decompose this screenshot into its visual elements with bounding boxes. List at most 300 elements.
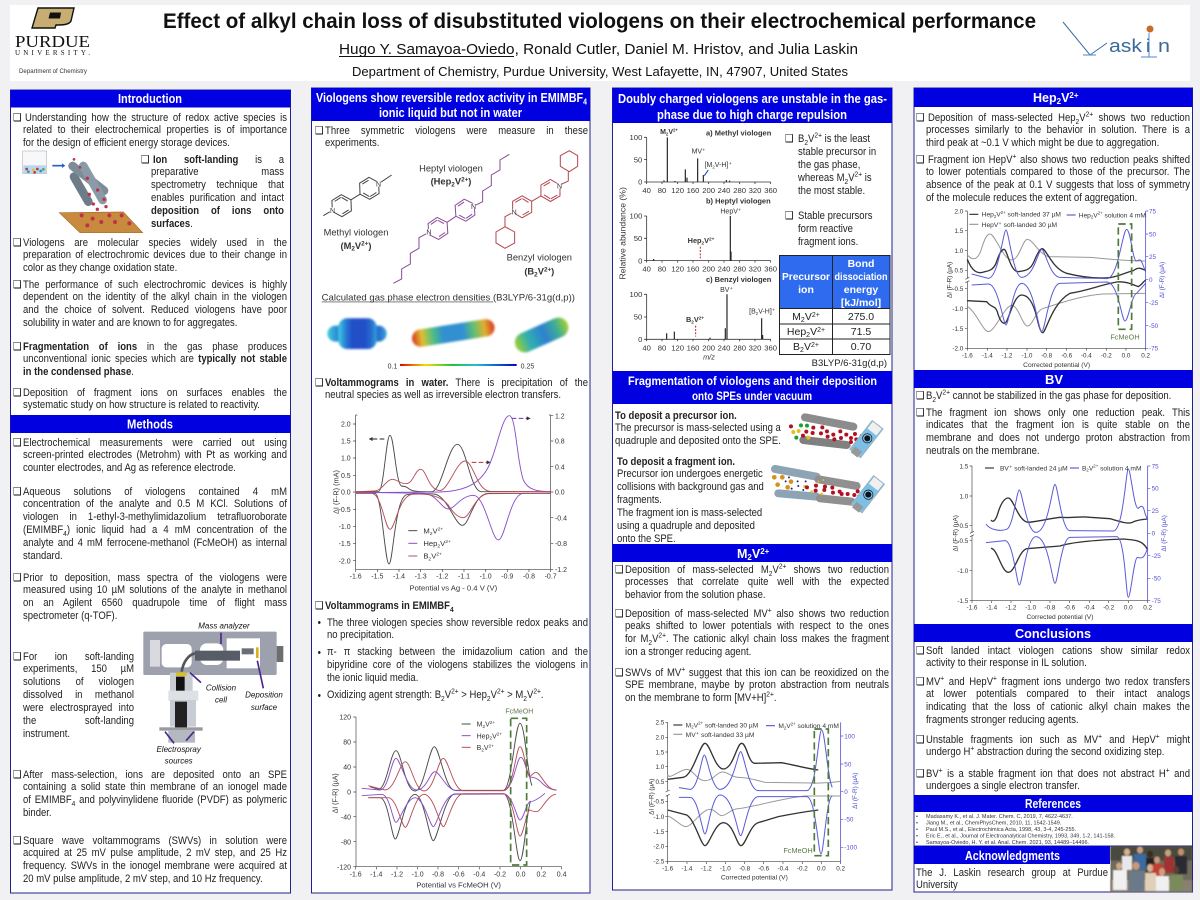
chart: mass spectra: a) Methyl viologen [706, 130, 771, 137]
chart: mass spectra: 200 [702, 343, 715, 352]
text: deposit fragment: The fragment ion is mass-selected [617, 507, 762, 519]
chart: BV SWV: ΔI (F-R) (µA) [952, 515, 959, 551]
chart: Hep2V SWV [947, 208, 1166, 369]
table: bond dissociation energy: V [810, 326, 817, 338]
chart: M2V SWV: -0.6 [758, 865, 770, 872]
legend: M [423, 526, 430, 535]
text: conclusion 2 [916, 673, 1190, 726]
text: methods SWV: 20 mV pulse amplitude, 2 mV step, and 10 Hz frequency. [23, 873, 263, 885]
chart: BV SWV: -0.2 [1103, 605, 1115, 612]
text: conclusion 1: Soft landed intact viologen cations show similar redox [926, 644, 1190, 656]
chart: mass spectra: 50 [634, 155, 642, 164]
text: Hep2V deposition: processes similarly to the behavior in solution. There is a [926, 124, 1190, 136]
chart: Hep2V SWV: 0 [1149, 277, 1153, 284]
heading: viologens redox [312, 88, 590, 121]
text: methods SWV: ❑ [13, 834, 22, 846]
chart: BV SWV: 25 [1152, 508, 1159, 515]
chart: Hep2V SWV: -75 [1149, 346, 1159, 353]
text: MV deposition [615, 605, 889, 658]
chart: mass spectra: b) Heptyl viologen [706, 198, 771, 205]
legend: 2+ [1093, 464, 1099, 469]
text: acknowledgments [916, 866, 1108, 891]
text: ion soft-landing [141, 152, 284, 230]
icon: soft-landing instrument diagram: Electrospray [156, 745, 202, 754]
text: HepV fragment: ❑ [916, 152, 925, 166]
chart: BV SWV: 0 [1152, 531, 1156, 538]
icon: soft-landing instrument diagram: Deposition [245, 691, 283, 700]
table: bond dissociation energy: 2 [800, 347, 804, 354]
text: device performance: solubility in water and are known to for aggregates. [23, 317, 237, 329]
legend: V [432, 526, 438, 535]
legend: B [477, 745, 481, 752]
text: SWVs of MV: SPE membrane, maybe by proton abstraction from neutrals [625, 679, 889, 691]
text: HepV fragment: absence of the peak at 0.1 V suggests that loss of symmetry [926, 179, 1190, 191]
legend: 2+ [1098, 211, 1103, 216]
text: EMIMBF4 bullets: bipyridine core of the viologens stabilizes the viologens in [327, 659, 588, 671]
icon: soft-landing instrument diagram: Collision [206, 683, 237, 692]
text: methods soft-landing: instrument. [23, 728, 70, 740]
heading: M2V: 2 [747, 553, 752, 562]
chart: M2V SWV [649, 720, 859, 882]
text: MV deposition: for M2V2+. The cationic alkyl chain loss makes the fragment [625, 631, 889, 647]
chart: BV SWV: 0.2 [1143, 605, 1153, 612]
heading: Introduction: Introduction [118, 92, 182, 106]
table: bond dissociation energy: 275.0 [848, 311, 874, 323]
chart: mass spectra: Hep [688, 236, 702, 245]
text: voltammograms in EMIMBF4: ❑ [315, 598, 324, 612]
chart: Hep2V SWV: -1.4 [982, 352, 993, 359]
text: BV fragment: indicates that the fragment ion is quite stable on the [926, 419, 1190, 431]
text: three viologens: experiments. [325, 137, 379, 149]
text: methods soft-landing: For ion soft-landing [23, 650, 134, 662]
chart: voltammograms in EMIMBF4: -0.8 [432, 871, 444, 878]
text: acknowledgments: The J. Laskin research group at Purdue [916, 866, 1108, 878]
chart: Hep2V SWV: -0.4 [1081, 352, 1092, 359]
callout: FcMeOH box [783, 729, 828, 856]
text: BV fragment: ❑ [916, 406, 925, 418]
chart: voltammograms in water: 1.5 [341, 439, 351, 446]
chart: mass spectra: 80 [658, 265, 666, 274]
panel: fourth column [914, 88, 1192, 892]
chart: BV SWV: -0.5 [957, 538, 969, 545]
density blob: heptyl [411, 318, 496, 348]
chart: mass spectra: B [686, 315, 691, 324]
chart: voltammograms in water: ΔI (F-R) (mA) [331, 470, 340, 514]
text: viologens use [13, 236, 287, 274]
chart: Hep2V SWV: ΔI (F-R) (µA) [1159, 262, 1166, 298]
chart: mass spectra: V-H]⁺ [715, 161, 732, 169]
legend: 2+ [436, 552, 442, 558]
text: deposition of fragments: Deposition of fragment ions on surfaces enables the [23, 386, 287, 398]
title: Effect of alkyl chain loss of disubstituted viologens on their electrochemical performance [163, 10, 1036, 33]
heading: References: References [1025, 797, 1081, 811]
molecule: heptyl viologen: (Hep [431, 177, 451, 187]
legend: Hep [1079, 212, 1091, 219]
text: SWVs of MV: on the membrane to form [MV+H]2+. [625, 690, 777, 704]
chart: mass spectra: 240 [718, 186, 730, 195]
chart: voltammograms in EMIMBF4: Potential vs FcMeOH (V) [416, 881, 501, 890]
chart: M2V SWV: 100 [844, 733, 855, 740]
references list: Jiang M., et al., ChemPhysChem, 2010, 11, 1542-1549. [926, 820, 1062, 826]
text: methods solutions: concentration of the analyte and 0.5 M KCl. Solutions of [23, 498, 287, 510]
icon: soft-landing instrument diagram: surface [251, 703, 278, 712]
legend: solution 4 mM [796, 723, 839, 730]
text: Hep2V deposition: third peak at ~0.1 V which might be due to aggregation. [926, 137, 1159, 149]
caption: calculated densities: Calculated gas phase electron densities (B3LYP/6-31g(d,p)) [322, 293, 575, 303]
text: methods solutions: viologen in 1-ethyl-3-methylimidazolium tetrafluoroborate [23, 511, 287, 523]
chart: voltammograms in EMIMBF4: ΔI (F-R) (µA) [332, 773, 339, 813]
text: HepV fragment: Fragment ion HepV+ also shows two reduction peaks shifted [928, 151, 1190, 166]
chart: mass spectra: 50 [634, 234, 642, 243]
text: SWVs of MV [615, 664, 889, 704]
text: voltammograms in water: neutral species as well as irreversible electron transfers. [325, 389, 561, 401]
text: EMIMBF4 bullets: π- π stacking between the imidazolium cation and the [327, 646, 588, 658]
heading: viologens redox: Viologens show reversible redox activity in EMIMBF [316, 91, 625, 105]
text: SWVs of MV: ❑ [615, 666, 624, 678]
chart: BV SWV: -50 [1152, 576, 1161, 583]
molecule: heptyl viologen: 2 [451, 181, 455, 188]
logo: Purdue University: PURDUE [15, 32, 90, 51]
text: ion soft-landing: preparative mass [151, 166, 284, 178]
table: bond dissociation energy: 2+ [817, 327, 825, 334]
chart: voltammograms in water: -2.0 [339, 558, 351, 565]
chart: mass spectra: V-H]⁺ [758, 308, 776, 316]
legend: 2 [1086, 468, 1089, 473]
text: methods solutions: Aqueous solutions of viologens contained 4 mM [23, 486, 287, 498]
chart: voltammograms in water: 2.0 [341, 422, 351, 429]
text: stable precursors: ❑ [785, 209, 794, 222]
chart: mass spectra: 360 [764, 343, 777, 352]
chart: voltammograms in water: -1.5 [371, 574, 383, 581]
panel: second column [312, 88, 590, 893]
text: conclusion 3 [916, 731, 1190, 758]
chart: mass spectra: HepV⁺ [720, 208, 742, 216]
legend: HepV⁺ soft-landed 30 µM [982, 222, 1057, 229]
text: deposit fragment: collisions with background gas and [617, 481, 764, 493]
text: ion soft-landing: spectrometry technique that [151, 179, 284, 191]
molecule: heptyl viologen: Heptyl viologen [419, 163, 483, 173]
chart: mass spectra: [M [705, 162, 712, 169]
text: conclusion 3: undergo H+ abstraction during the second oxidizing step. [926, 744, 1164, 758]
text: gas-phase stability: the most stable. [798, 185, 865, 197]
text: EMIMBF4 bullets: • [318, 690, 321, 702]
chart: M2V SWV: -1.4 [682, 865, 693, 872]
table: bond dissociation energy: ion [798, 284, 814, 296]
text: EMIMBF4 bullets: Oxidizing agent strength: B2V2+ > Hep2V2+ > M2V2+. [327, 686, 544, 703]
text: EMIMBF4 bullets: • [318, 646, 321, 658]
text: methods soft-landing: the soft-landing [23, 715, 134, 727]
text: BV fragment: neutrals on the membrane. [926, 445, 1040, 457]
chart: mass spectra: 2+ [673, 127, 678, 132]
chart: M2V SWV: -1.0 [653, 814, 665, 821]
heading: Methods [10, 415, 290, 433]
text: methods SPE: ❑ [13, 768, 22, 780]
heading: BV: BV [1045, 372, 1063, 387]
text: intro bullet 1: related to their electrochemical properties is of importance [23, 124, 287, 136]
chart: voltammograms in water: -1.5 [339, 541, 351, 548]
panel: left column [10, 90, 290, 893]
text: conclusion 4: ❑ [916, 766, 925, 780]
molecule: heptyl viologen: 2+ [461, 176, 469, 183]
table: bond dissociation energy: 2 [806, 332, 810, 339]
chart: mass spectra: 120 [671, 265, 684, 274]
text: gas-phase stability: the gas phase, [798, 159, 860, 171]
text: conclusion 2: MV+ and HepV+ fragment ions undergo two redox transfers [926, 673, 1190, 688]
text: device performance: The performance of such electrochromic devices is highly [23, 278, 287, 290]
references list: Eric E., et al., Journal of Electroanalytical Chemistry, 1993, 349, 1-2, 141-158. [926, 834, 1116, 840]
molecule: benzyl viologen: V [538, 267, 545, 277]
chart: BV SWV: -25 [1152, 553, 1161, 560]
table: bond dissociation energy: 2 [801, 317, 805, 324]
text: gas-phase stability: stable precursor in [798, 146, 876, 158]
molecule: benzyl viologen: (B [524, 267, 534, 277]
panel: third column [612, 88, 892, 890]
chart: voltammograms in EMIMBF4: 0.0 [516, 871, 526, 878]
legend: 2 [1091, 215, 1094, 220]
chart: Hep2V SWV: 1.0 [955, 248, 964, 255]
chart: mass spectra: 280 [733, 186, 746, 195]
chart: BV SWV: -0.6 [1064, 605, 1076, 612]
chart: BV SWV: ΔI (F-R) (µA) [1161, 515, 1168, 551]
chart: BV SWV: -1.5 [957, 598, 969, 605]
text: gas-phase stability: B2V2+ is the least [798, 130, 870, 147]
molecule: heptyl viologen [393, 154, 509, 283]
legend: 2 [489, 736, 492, 741]
heading: Methods: Methods [127, 418, 173, 432]
text: conclusion 4 [916, 765, 1190, 792]
chart: BV SWV: -75 [1152, 598, 1161, 605]
chart: mass spectra: 360 [764, 186, 777, 195]
text: fragmentation: Fragmentation of ions in the gas phase produces [23, 340, 287, 352]
logo: Laskin: n [1158, 36, 1170, 56]
text: gas-phase stability: whereas M2V2+ is [798, 169, 872, 186]
chart: mass spectra: 200 [702, 265, 715, 274]
text: methods SWV: Square wave voltammograms (SWVs) in solution were [23, 834, 287, 846]
legend: 2 [784, 725, 787, 730]
text: gas-phase stability [785, 130, 876, 197]
chart: mass spectra: 2 [666, 131, 669, 136]
chart: mass spectra: V [668, 129, 673, 136]
heading: doubly charged [612, 88, 892, 123]
table: bond dissociation energy: dissociation [834, 271, 888, 283]
legend [673, 721, 839, 739]
table: bond dissociation energy: energy [844, 284, 878, 296]
references list: • [916, 834, 918, 840]
text: MV deposition: ❑ [615, 606, 624, 620]
legend [408, 526, 451, 562]
legend: solution 4 mM [1098, 465, 1142, 472]
legend: 2+ [1001, 210, 1006, 215]
icon: soft-landing instrument diagram: Mass analyzer [198, 622, 250, 631]
chart: voltammograms in water: -0.5 [339, 507, 351, 514]
text: intro bullet 1: Understanding how the structure of redox active species is [25, 112, 287, 124]
chart: voltammograms in water: -1.1 [458, 574, 470, 581]
text: viologens use: ❑ [13, 236, 22, 248]
chart: mass spectra: 40 [642, 186, 651, 195]
chart: voltammograms in EMIMBF4: -1.4 [370, 871, 382, 878]
text: EMIMBF4 bullets: the ionic liquid media. [327, 672, 418, 684]
chart: mass spectra: 160 [687, 265, 699, 274]
chart: voltammograms in water: -1.0 [339, 524, 351, 531]
chart: Hep2V SWV: -1.0 [1022, 352, 1033, 359]
text: intro bullet 1: ❑ [13, 110, 22, 124]
molecule: methyl viologen: 2 [351, 246, 355, 253]
chart: BV SWV: 50 [1152, 486, 1159, 493]
molecule: benzyl viologen: ) [551, 267, 554, 277]
heading: References [914, 795, 1192, 812]
text: voltammograms in water: ❑ [315, 376, 324, 388]
legend: Hep [423, 539, 437, 548]
chart: voltammograms in EMIMBF4: 120 [339, 715, 351, 722]
legend: 2 [430, 531, 433, 537]
chart: voltammograms in EMIMBF4: 0.4 [557, 871, 567, 878]
chart: mass spectra: 0 [638, 335, 642, 344]
chart: voltammograms in water: -1.4 [393, 574, 405, 581]
text: voltammograms in water: Voltammograms in water. There is precipitation of the [325, 376, 588, 388]
legend [969, 210, 1146, 229]
chart: mass spectra: 0 [638, 178, 642, 187]
legend: solution 4 mM [1103, 212, 1146, 219]
chart: voltammograms in EMIMBF4 [332, 708, 567, 890]
header banner [10, 5, 1190, 81]
chart: voltammograms in water: 1.2 [555, 413, 565, 420]
legend: B [423, 552, 428, 561]
text: M2V deposition [615, 561, 889, 601]
colour scale: 0.25 [521, 363, 534, 370]
chart: mass spectra: 2 [712, 164, 715, 169]
chart: M2V SWV: 0 [844, 789, 848, 796]
legend: 2 [994, 214, 997, 219]
text: HepV fragment: of the molecule reduces the extent of aggregation. [926, 192, 1137, 204]
references list: • [916, 840, 918, 846]
chart: Hep2V SWV: -0.2 [1101, 352, 1112, 359]
text: EMIMBF4 bullets: The three viologen species show reversible redox peaks and [327, 616, 588, 628]
text: HepV fragment: to lower potentials compared to those of the precursor. The [926, 166, 1190, 178]
text: fragmentation: in the condensed phase. [23, 366, 134, 378]
callout: FcMeOH box [1110, 224, 1140, 341]
heading: Hep2V [914, 88, 1192, 107]
molecule: benzyl viologen: 2+ [544, 266, 551, 273]
table: bond dissociation energy: V [804, 341, 811, 353]
chart: M2V SWV: -100 [844, 845, 857, 852]
chart: Hep2V SWV: 1.5 [955, 228, 964, 235]
chart: Hep2V SWV: 0.5 [955, 268, 964, 275]
heading: Conclusions [914, 624, 1192, 642]
chart: mass spectra: 240 [718, 343, 730, 352]
legend: 2+ [489, 743, 494, 748]
text: deposit fragment: fragments. [617, 494, 662, 506]
text: methods SPE: binder. [23, 807, 52, 819]
references list [916, 814, 1116, 846]
text: deposit precursor: To deposit a precursor ion. [615, 410, 737, 422]
text: SWVs of MV: SWVs of MV+ suggest that this ion can be reoxidized on the [625, 664, 889, 678]
text: ion soft-landing: ❑ [141, 152, 150, 166]
references list: • [916, 820, 918, 826]
chart: mass spectra: 320 [749, 265, 761, 274]
chart: voltammograms in EMIMBF4: -1.0 [412, 871, 424, 878]
molecule: heptyl viologen: N [426, 230, 431, 237]
text: methods electrochemical: ❑ [13, 436, 22, 448]
text: methods solutions: analyte and 4 mM ferrocene-methanol (FcMeOH) as internal [23, 537, 287, 549]
text: conclusion 4: BV+ is a stable fragment ion that does not abstract H+ and [926, 765, 1190, 780]
icon: fragment deposition schematic [772, 469, 885, 514]
chart: Hep2V SWV: -0.6 [1061, 352, 1073, 359]
chart: BV SWV: -0.8 [1045, 605, 1056, 612]
chart: M2V SWV: -50 [844, 817, 854, 824]
text: methods SWV: acquired at 25 mV pulse amplitude, 2 mV step, and 25 Hz [23, 847, 287, 859]
text: deposit fragment: onto the SPE. [617, 533, 676, 545]
text: voltammograms in water [315, 376, 588, 401]
text: methods soft-landing: dissolved in methanol [23, 689, 134, 701]
table: bond dissociation energy: 71.5 [851, 326, 871, 338]
text: three viologens: ❑ [315, 124, 324, 136]
text: methods mass spectra: spectrometer (q-TOF). [23, 610, 117, 622]
chart: voltammograms in water: Potential vs Ag - 0.4 V (V) [409, 584, 498, 593]
text: stable precursors [785, 209, 872, 248]
heading: Acknowledgments [914, 846, 1110, 864]
text: fragmentation: ❑ [13, 340, 22, 352]
photo: research group [1110, 846, 1192, 892]
text: device performance: ❑ [13, 278, 22, 290]
legend: V [492, 733, 497, 740]
chart: voltammograms in water: -1.0 [480, 574, 492, 581]
chart: mass spectra: BV⁺ [720, 286, 733, 294]
chart: M2V SWV: -1.5 [653, 829, 665, 836]
molecule: methyl viologen: V [355, 241, 362, 251]
text: deposit fragment [617, 456, 764, 545]
legend: V [484, 745, 489, 752]
references list: • [916, 827, 918, 833]
text: fragmentation [13, 340, 287, 378]
chart: mass spectra: 320 [749, 343, 761, 352]
text: conclusion 2: ❑ [916, 674, 925, 688]
text: Hep2V deposition [916, 109, 1190, 149]
chart: BV SWV [952, 463, 1168, 621]
text: acknowledgments: University [916, 879, 958, 891]
chart: mass spectra: c) Benzyl viologen [706, 277, 771, 284]
text: MV deposition: Deposition of mass-selected MV+ also shows two reduction [625, 605, 889, 620]
table: bond dissociation energy: Precursor [782, 271, 830, 283]
legend: 2+ [445, 539, 451, 545]
text: HepV fragment [916, 151, 1190, 204]
chart: voltammograms in water: -0.9 [501, 574, 513, 581]
chart: voltammograms in water: -1.3 [415, 574, 427, 581]
chart: BV SWV: 0.5 [960, 523, 969, 530]
electron density maps [322, 293, 575, 370]
molecule: heptyl viologen: N [471, 204, 476, 211]
chart: mass spectra: 100 [630, 290, 642, 299]
chart: mass spectra: 2 [691, 319, 694, 324]
text: deposit fragment: To deposit a fragment ion. [617, 456, 735, 468]
text: methods soft-landing: were electrosprayed into [23, 702, 134, 714]
chart: BV SWV: -0.4 [1084, 605, 1095, 612]
chart: mass spectra: 360 [764, 265, 777, 274]
chart: mass spectra: V [694, 315, 699, 324]
chart: mass spectra: 240 [718, 265, 730, 274]
logo: Purdue University: UNIVERSITY. [15, 49, 90, 57]
colour scale [388, 363, 534, 370]
text: methods soft-landing [13, 650, 134, 740]
text: conclusion 1 [916, 644, 1190, 669]
text: methods SPE [13, 768, 287, 819]
chart: mass spectra: 40 [642, 343, 651, 352]
chart: M2V SWV: -2.0 [653, 844, 665, 851]
icon: soft-landing instrument diagram: cell [215, 695, 227, 704]
chart: M2V SWV: -0.2 [797, 865, 808, 872]
text: ion soft-landing: surfaces. [151, 218, 193, 230]
references list: Samayoa-Oviedo, H. Y. et al. Anal. Chem. 2021, 93, 14489–14496. [926, 840, 1090, 846]
chart: Hep2V SWV: 25 [1149, 254, 1156, 261]
